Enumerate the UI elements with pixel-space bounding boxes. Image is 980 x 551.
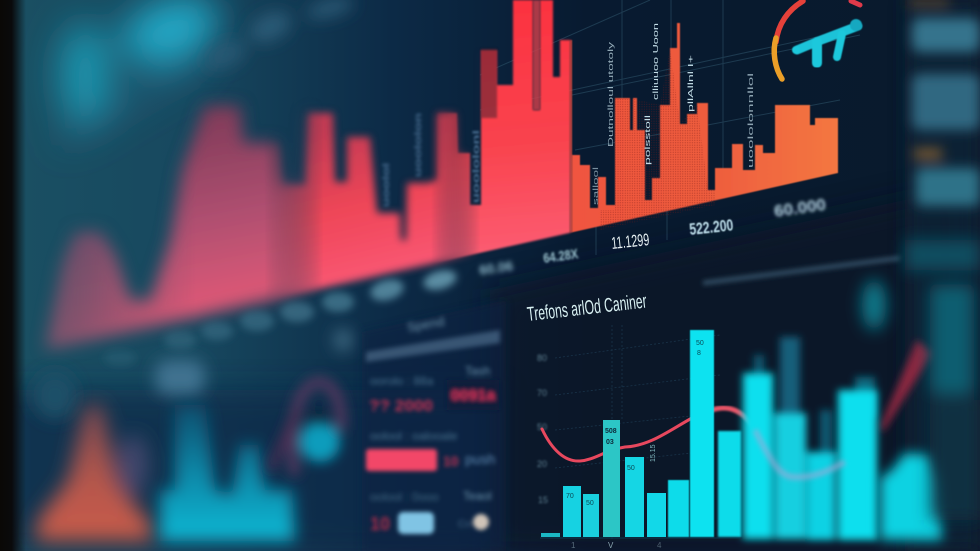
y-axis labels: 80 [537, 353, 547, 363]
row 1: oorolo : 88a [370, 374, 434, 388]
divider bar [366, 330, 500, 362]
orange triangle chart [35, 405, 152, 541]
axis value labels under red chart: 522.200 [688, 215, 734, 239]
chart title: Trefons arlOd Caniner [526, 291, 648, 326]
axis value labels under red chart: 60.06 [478, 257, 514, 278]
axis value labels under red chart: 64.28X [542, 245, 580, 266]
vertical bar annotations: uoololonl [471, 130, 481, 203]
bar value labels: 03 [606, 439, 614, 446]
axis tick marks: 4 [657, 541, 662, 550]
y-axis labels: 50 [537, 422, 547, 432]
blurred top chips [200, 0, 355, 75]
blurred last bar [880, 453, 942, 540]
bar value labels: 508 [605, 428, 617, 435]
axis value labels under red chart: 60.000 [773, 195, 827, 221]
y-axis labels [537, 353, 548, 505]
row 2: push [465, 451, 495, 467]
blurred foreground bars [743, 373, 877, 540]
row 1: ?? 2000 [369, 398, 433, 415]
panel: middle stats list [362, 300, 506, 551]
vertical bar annotations: clliuuoo Uoon [651, 23, 660, 100]
icon: cyan gauge symbol [792, 19, 862, 63]
bar value labels: 70 [566, 493, 574, 500]
bar value labels: 50 [696, 340, 704, 347]
row 2 [366, 429, 495, 471]
row 2: oolool : oalooale [370, 429, 458, 443]
blurred gauge [270, 382, 341, 475]
chart grid [555, 325, 720, 540]
red trend line [542, 340, 933, 461]
panel: right-side blurred stats [862, 0, 980, 520]
row 3: Teaol [463, 489, 492, 503]
panel: bottom-left blurred charts [33, 329, 352, 541]
vertical bar annotations: sallool [591, 166, 600, 205]
vertical bar annotations: uoololon [413, 113, 423, 177]
row 3: oolool : 0ooo [370, 490, 439, 504]
y-axis labels: 70 [537, 388, 547, 398]
y-axis labels: 20 [537, 459, 547, 469]
teal area chart [160, 405, 295, 541]
vertical bar annotations: Dutnolloul utotoly [606, 42, 615, 147]
bars far and blurred behind [754, 337, 875, 470]
bar value labels [566, 340, 704, 507]
heading chip: Spend [406, 314, 446, 335]
baseline [540, 537, 742, 539]
bar value labels: 50 [586, 500, 594, 507]
top-left blurred teal chart [59, 0, 227, 150]
row 1: 0091a [451, 387, 496, 404]
top divider bar [703, 258, 900, 283]
cyan bars [541, 330, 741, 537]
row 3: 10 [370, 514, 390, 534]
vertical bar annotations: pllAllnl I+ [686, 54, 695, 112]
bar value labels: 50 [627, 465, 635, 472]
row 3: Co [458, 519, 471, 530]
vertical bar annotations: uoolol [381, 163, 391, 207]
axis tick marks: V [608, 541, 614, 550]
axis tick marks [571, 541, 662, 550]
red area chart [45, 0, 838, 350]
blurred label chips along chart base [104, 267, 459, 366]
row 1: Tash [465, 364, 490, 378]
gauge top right [774, 1, 860, 79]
bar value labels: 8 [697, 350, 701, 357]
y-axis labels: 15 [538, 495, 548, 505]
vertical bar annotations: polsstoll [643, 114, 652, 165]
legend chips [33, 329, 352, 419]
row 3 [370, 489, 492, 534]
axis value labels under red chart: 11.1299 [610, 230, 650, 253]
panel: cyan and red combo chart [526, 258, 942, 550]
row 2: 10 [443, 453, 459, 469]
row 1 [369, 364, 499, 415]
axis tick marks: 1 [571, 541, 576, 550]
vertical bar annotations: uoololonnllol [746, 72, 755, 168]
grid lines [480, 0, 860, 255]
bar value labels: 15.15 [650, 444, 657, 462]
faded trend line over bars [755, 430, 845, 477]
axis value labels under red chart [478, 195, 827, 278]
vertical bar annotations [381, 23, 755, 207]
